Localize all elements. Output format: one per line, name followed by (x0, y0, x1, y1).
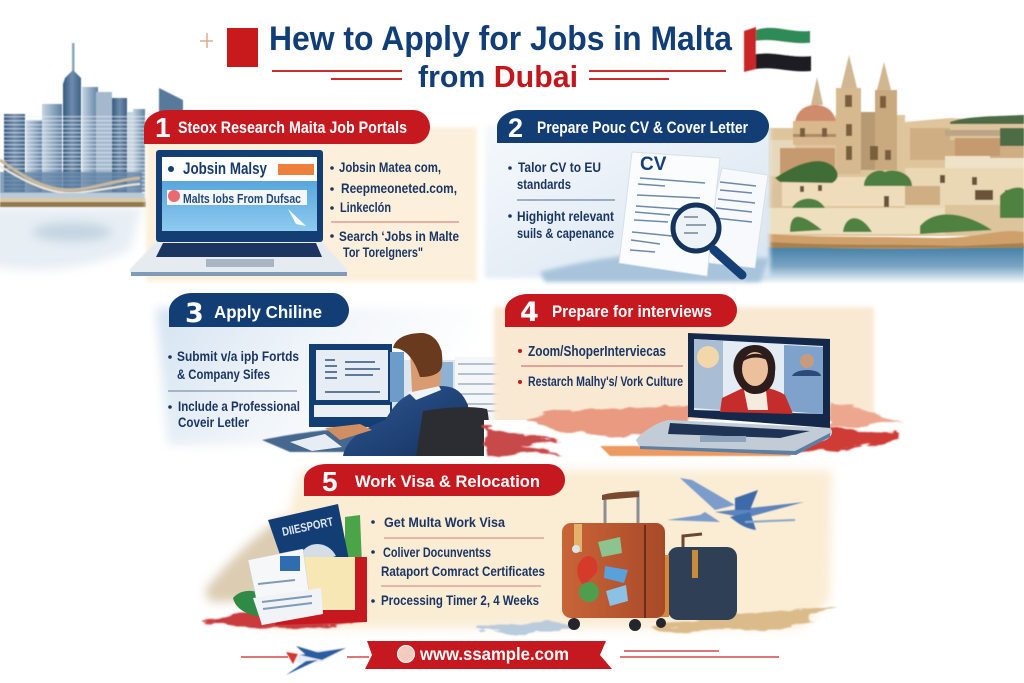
church towers (836, 88, 861, 174)
icon: passport and documents: DIIESPORT (281, 514, 335, 539)
header: step 5: Work Visa & Relocation (355, 472, 540, 491)
illustration: man at computer (262, 333, 505, 456)
website url: www.ssample.com (419, 644, 569, 664)
panel background (240, 470, 832, 628)
footer lines right (620, 651, 779, 657)
bullets: cv tips: standards (517, 176, 571, 192)
header: step 4: 4 (520, 297, 539, 328)
water (0, 207, 142, 270)
bullets: cv tips: Talor CV to EU (518, 159, 601, 175)
lower walls (782, 177, 905, 206)
panel background (146, 127, 477, 282)
panel: step 4 interviews (484, 294, 904, 456)
banner ribbon (365, 641, 612, 669)
header: step 2: Prepare Pouc CV & Cover Letter (537, 119, 748, 137)
brush stroke (540, 256, 770, 282)
bullets: cv tips: suils & capenance (517, 225, 614, 241)
bullets: visa: Processing Timer 2, 4 Weeks (381, 592, 539, 608)
header: step 3: 3 (185, 298, 204, 329)
chair (416, 407, 489, 456)
brush strokes (484, 402, 904, 456)
icon: laptop: Jobsin Malsy (183, 160, 268, 178)
header: step 3: Apply Chiline (214, 302, 322, 322)
icon: cv documents and magnifier (619, 152, 768, 276)
icon: airplane (667, 478, 804, 530)
bullets: apply: Coveir Letler (178, 414, 249, 430)
panel: step 5 visa (205, 464, 838, 632)
back buildings (768, 115, 1024, 236)
man (343, 386, 470, 456)
icon: globe (398, 646, 414, 662)
icon: passport and documents (233, 504, 367, 625)
icon: small airplane (286, 646, 346, 675)
bullets: job portals: Reepmeoneted.com, (341, 180, 457, 196)
bullets: job portals (330, 159, 459, 260)
bullets: job portals: Search ‘Jobs in Malte (339, 228, 459, 244)
title underline left (272, 71, 402, 79)
panel: step 1 research (130, 110, 477, 282)
panel background (485, 126, 770, 278)
bullets: interviews (518, 343, 683, 389)
bullets: visa (371, 514, 545, 608)
sea (745, 245, 1024, 284)
bullets: job portals: Tor Torelgners" (343, 244, 423, 260)
panel background (494, 307, 874, 425)
bullets: visa: Coliver Docunventss (383, 544, 491, 560)
bullets: apply: & Company Sifes (177, 366, 270, 382)
panel background (156, 308, 480, 445)
bullets: visa: Rataport Comract Certificates (381, 563, 545, 579)
icon: uae flag (744, 27, 811, 72)
footer lines left (241, 656, 369, 658)
header: step 5: 5 (322, 466, 338, 497)
bullets: interviews: Restarch Malhy's/ Vork Culture (528, 374, 683, 389)
header: step 1 (144, 110, 430, 144)
title (200, 20, 811, 94)
illustration: dubai skyline (0, 43, 183, 270)
bullets: cv tips (508, 159, 615, 241)
title underline right (589, 71, 726, 79)
bullets: cv tips: Highight relevant (517, 208, 614, 224)
bullets: job portals: Jobsin Matea com, (339, 159, 441, 175)
header: step 3 (169, 293, 349, 329)
church dome (795, 105, 836, 122)
icon: suitcases (562, 492, 737, 631)
illustration: malta cityscape (745, 55, 1024, 284)
header: step 1: 1 (155, 112, 171, 143)
document behind (455, 357, 505, 425)
footer banner (241, 641, 779, 675)
sparkle (200, 33, 213, 48)
icon: cv documents and magnifier: CV (640, 154, 667, 175)
header: step 4 (505, 294, 737, 328)
rocks (762, 231, 1024, 249)
bullets: job portals: Linkeclón (340, 199, 391, 215)
bridge (0, 160, 140, 190)
header: step 1: Steox Research Maita Job Portals (178, 119, 407, 137)
header: step 4: Prepare for interviews (552, 302, 712, 321)
bullets: interviews: Zoom/ShoperInterviecas (528, 343, 666, 360)
panel: step 2 cv (485, 110, 770, 282)
bullets: visa: Get Multa Work Visa (384, 514, 505, 530)
trees (775, 161, 838, 183)
icon: laptop: Malts Iobs From Dufsac (183, 191, 301, 206)
bullets: apply: Include a Professional (178, 398, 300, 414)
header: step 2 (497, 110, 769, 143)
bullets: apply (168, 348, 300, 430)
desk (262, 428, 372, 452)
bullets: apply: Submit v/a ipþ Fortds (177, 348, 299, 364)
icon: laptop (130, 150, 347, 276)
brush strokes (205, 515, 838, 632)
heading line 2: from Dubai (418, 59, 578, 94)
monitor (309, 344, 392, 427)
icon: malta flag red block (227, 28, 258, 67)
panel: step 3 apply (156, 293, 505, 456)
header: step 2: 2 (508, 113, 523, 143)
heading line 1: Hew to Apply for Jobs in Malta (269, 20, 733, 58)
header: step 5 (304, 464, 565, 497)
icon: laptop video call (636, 333, 832, 455)
